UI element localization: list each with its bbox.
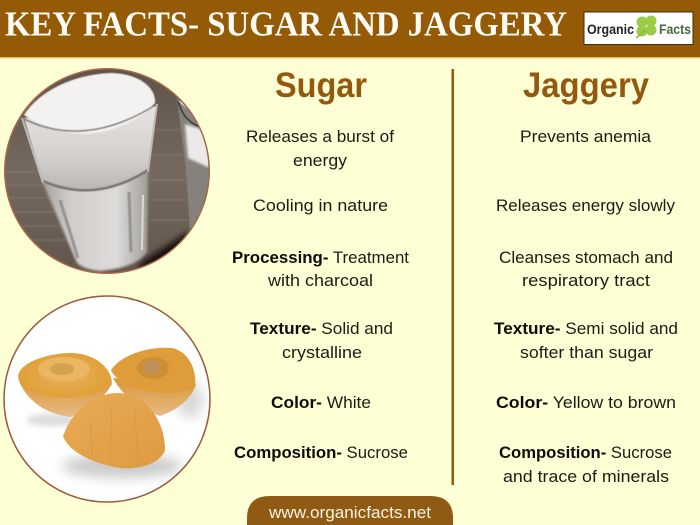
logo: Organic Facts: Facts (659, 22, 691, 37)
second glass (177, 98, 212, 232)
sugar in upper glass (24, 106, 157, 189)
fact: texture (494, 320, 678, 362)
heading: Sugar: Sugar (275, 66, 367, 105)
jaggery half left (18, 378, 112, 417)
fact: texture: crystalline (282, 344, 362, 362)
icon: clover (636, 16, 656, 38)
fact: composition: and trace of minerals (503, 468, 669, 486)
fact: color: Color- Yellow to brown (496, 394, 676, 412)
fact: energy burst (246, 128, 394, 170)
footer pill: website: www.organicfacts.net (268, 504, 431, 522)
fact: cleanses (499, 249, 673, 290)
shadows (62, 454, 182, 478)
fact: energy burst: energy (293, 152, 348, 170)
fact: texture: Texture- Solid and (250, 320, 393, 338)
heading: Jaggery: Jaggery (523, 66, 649, 105)
fact: cleanses: Cleanses stomach and (499, 249, 673, 267)
title: KEY FACTS- SUGAR AND JAGGERY (5, 4, 567, 44)
glass body lower (43, 170, 148, 271)
fact: cleanses: respiratory tract (522, 272, 650, 290)
sugar heap (24, 73, 155, 134)
fact: cooling: Cooling in nature (253, 197, 388, 215)
header banner (0, 0, 700, 58)
logo: Organic Facts (584, 12, 693, 44)
logo: Organic Facts: Organic (587, 21, 634, 37)
footer pill: website (247, 496, 453, 525)
fact: anemia: Prevents anemia (520, 128, 652, 146)
fact: texture: Texture- Semi solid and (494, 320, 678, 338)
photo: glass of sugar (4, 68, 210, 274)
fact: processing: with charcoal (267, 272, 373, 290)
fact: composition: Composition- Sucrose (234, 444, 408, 462)
fact: composition (499, 444, 672, 486)
fact: processing: Processing- Treatment (232, 249, 409, 267)
fact: energy burst: Releases a burst of (246, 128, 394, 146)
jaggery half right (113, 378, 196, 416)
column: jaggery (494, 66, 678, 486)
fact: processing (232, 249, 409, 290)
jaggery dome front (63, 393, 165, 468)
photo: jaggery (4, 296, 210, 502)
vertical divider (452, 69, 454, 485)
fact: color: Color- White (271, 394, 371, 412)
column: sugar (232, 66, 409, 462)
fact: composition: Composition- Sucrose (499, 444, 672, 462)
fact: texture: softer than sugar (520, 344, 654, 362)
fact: slow energy: Releases energy slowly (496, 197, 676, 215)
fact: texture (250, 320, 393, 362)
